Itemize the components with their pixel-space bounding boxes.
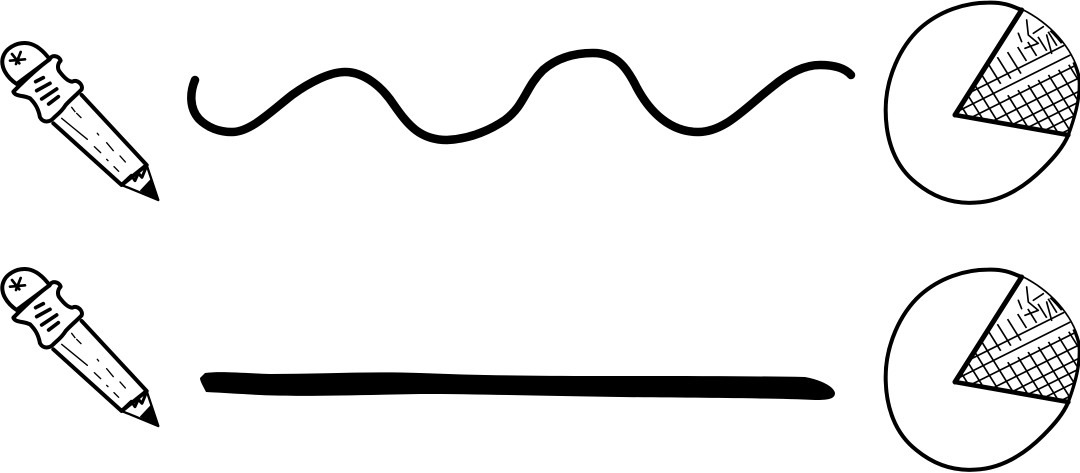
wavy line bbox=[191, 53, 851, 140]
icon: pie chart top bbox=[882, 0, 1080, 213]
icon: pencil bottom bbox=[2, 269, 158, 426]
icon: pie chart bottom bbox=[882, 254, 1080, 473]
icon: pencil top bbox=[2, 43, 158, 200]
straight thick line bbox=[200, 372, 835, 400]
